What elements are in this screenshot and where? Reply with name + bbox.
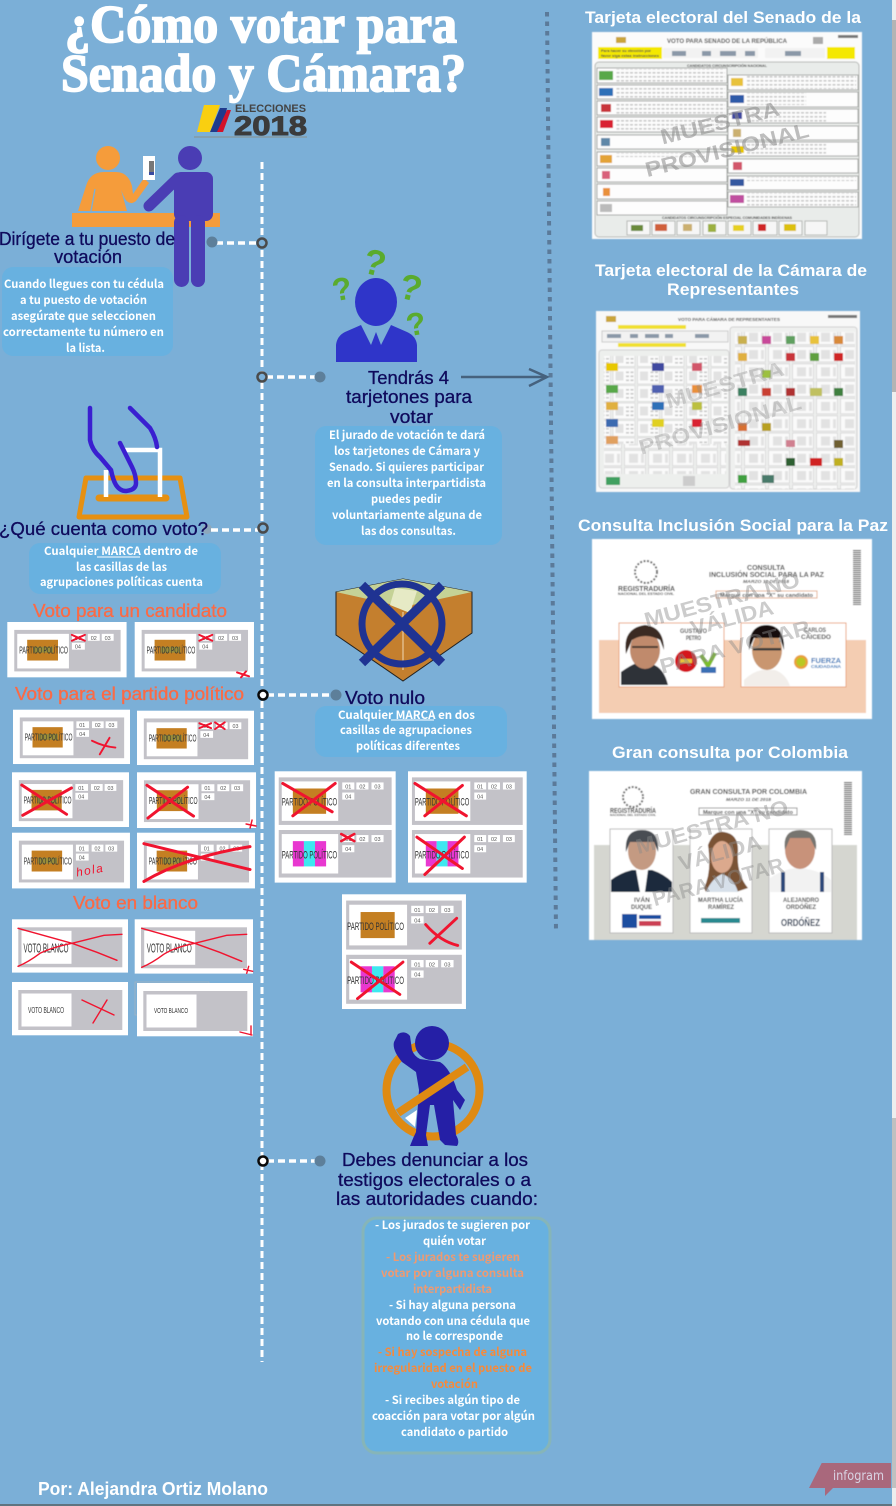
heading: Tendrás 4 tarjetones: tarjetones para xyxy=(346,387,473,407)
ballot image: inclusión social: CARLOS xyxy=(804,627,827,634)
arrow: to ballots xyxy=(461,369,547,386)
ballot: partido 4: 04 xyxy=(204,795,210,801)
icon: person with question marks: ? xyxy=(329,270,355,308)
ballot: partido 3: 04 xyxy=(78,795,84,801)
logo: elecciones 2018 xyxy=(194,103,307,141)
ballot image: inclusión social: VÁLIDA xyxy=(688,596,776,641)
ballot: candidato 2 xyxy=(135,622,254,677)
connector: step 4 xyxy=(258,690,342,700)
title: Senado y Cámara? xyxy=(61,45,466,103)
infogram tag: infogram xyxy=(833,1469,884,1484)
panel: cuatro tarjetones: puedes pedir xyxy=(371,491,443,507)
ballot: nulo B: PARTIDO POLÍTICO xyxy=(415,796,469,809)
ballot: nulo C: PARTIDO POLÍTICO xyxy=(347,920,404,933)
panel: denuncias: - Los jurados te sugieren por xyxy=(375,1217,531,1233)
icon: crossed ballot box xyxy=(336,579,472,681)
ballot image: inclusión social: CAICEDO xyxy=(801,634,831,641)
ballot: nulo C: 02 xyxy=(429,908,435,914)
panel: denuncias: irregularidad en el puesto de xyxy=(374,1360,532,1376)
ballot: partido 6: 02 xyxy=(220,847,226,853)
panel: denuncias: - Si recibes algún tipo de xyxy=(385,1392,520,1408)
panel: cuatro tarjetones: las dos consultas. xyxy=(361,523,456,539)
ballot: nulo A xyxy=(275,771,396,883)
heading: cámara xyxy=(595,261,867,299)
ballot image: inclusión social: GUSTAVO xyxy=(680,628,707,635)
ballot: candidato 2: 01 xyxy=(202,636,208,642)
ballot: partido 1 xyxy=(13,710,130,764)
ballot image: gran consulta: GRAN CONSULTA POR COLOMBIA xyxy=(690,789,807,796)
panel: cualquier marca: agrupaciones políticas cuenta xyxy=(40,574,203,590)
ballot: nulo A: 04 xyxy=(345,795,351,801)
ballot: partido 2: 02 xyxy=(219,724,225,730)
heading: debes denunciar: Debes denunciar a los xyxy=(342,1150,528,1170)
ballot image: inclusión social: REGISTRADURÍA xyxy=(618,584,676,593)
ballot image: senado xyxy=(592,32,862,239)
ballot: partido 6: 03 xyxy=(233,847,239,853)
ballot: partido 6: PARTIDO POLÍTICO xyxy=(149,854,197,868)
ballot image: inclusión social: CONSULTA xyxy=(747,563,786,572)
panel: denuncias: votar por alguna consulta xyxy=(381,1265,524,1281)
icon: person with question marks: ? xyxy=(395,265,427,310)
heading: senado: Tarjeta electoral del Senado de la xyxy=(585,8,862,27)
ballot: blanco 4 xyxy=(135,982,253,1036)
icon: person with question marks: ? xyxy=(403,305,429,343)
ballot: nulo A: 03 xyxy=(374,784,381,791)
heading: Tendrás 4 tarjetones: Tendrás 4 xyxy=(368,368,449,388)
heading: inclusión social: Consulta Inclusión Social para la Paz xyxy=(578,516,888,535)
ballot: partido 3: PARTIDO POLÍTICO xyxy=(24,794,71,807)
heading: qué cuenta como voto: ¿Qué cuenta como voto? xyxy=(0,519,208,539)
ballot image: gran consulta: DUQUE xyxy=(631,905,652,911)
ballot: nulo C: 02 xyxy=(429,962,435,968)
icon: person with question marks xyxy=(329,240,429,362)
ballot: blanco 1: VOTO BLANCO xyxy=(24,940,68,955)
icon: no-coercion sign xyxy=(386,1026,480,1146)
ballot: partido 3: 01 xyxy=(78,786,84,792)
ballot: partido 1: 04 xyxy=(79,732,85,738)
ballot image: senado: PROVISIONAL xyxy=(643,119,812,182)
panel: denuncias: votando con una cédula que xyxy=(376,1313,530,1329)
panel: denuncias: interpartidista xyxy=(413,1281,492,1297)
ballot: partido 5: 04 xyxy=(79,856,85,862)
author credit: Por: Alejandra Ortiz Molano xyxy=(38,1479,268,1499)
panel: nulo: políticas diferentes xyxy=(356,738,460,754)
ballot: partido 1: 03 xyxy=(108,723,114,729)
ballot: partido 2: 01 xyxy=(203,724,209,730)
ballot: candidato 1: PARTIDO POLÍTICO xyxy=(19,644,68,657)
heading: Tendrás 4 tarjetones xyxy=(346,368,473,427)
ballot: blanco 3: VOTO BLANCO xyxy=(28,1006,64,1015)
panel: cuatro tarjetones: los tarjetones de Cámara y xyxy=(334,443,480,459)
infogram tag xyxy=(809,1463,891,1496)
ballot: candidato 2: 03 xyxy=(232,636,238,642)
heading: debes denunciar: las autoridades cuando: xyxy=(336,1189,538,1209)
ballot: nulo A: 02 xyxy=(359,837,365,843)
ballot: partido 4: 03 xyxy=(234,786,240,792)
panel: nulo xyxy=(315,706,507,757)
panel: denuncias: candidato o partido xyxy=(401,1424,508,1440)
ballot: nulo B: 03 xyxy=(506,837,512,843)
ballot: candidato 2: PARTIDO POLÍTICO xyxy=(147,644,195,657)
ballot: candidato 1: 01 xyxy=(75,636,81,642)
ballot: nulo A: 01 xyxy=(345,837,351,843)
ballot image: inclusión social: MUESTRA NO xyxy=(642,569,802,632)
heading: Dirígete: votación xyxy=(54,247,122,267)
heading: cámara: Tarjeta electoral de la Cámara de xyxy=(595,261,867,280)
ballot: blanco 2 xyxy=(135,919,253,974)
ballot image: senado: Para hacer su elección por xyxy=(601,48,651,53)
ballot: nulo B: 01 xyxy=(477,837,483,843)
ballot image: senado: MUESTRA xyxy=(658,98,782,149)
ballot: nulo B: PARTIDO POLÍTICO xyxy=(415,848,469,861)
panel: al llegar: a tu puesto de votación xyxy=(20,292,147,308)
panel: al llegar: Cuando llegues con tu cédula xyxy=(4,276,164,292)
ballot: nulo B: 04 xyxy=(477,847,483,853)
ballot: partido 5: hola xyxy=(75,861,105,879)
ballot: nulo C: PARTIDO POLÍTICO xyxy=(347,974,404,987)
ballot: partido 3: 03 xyxy=(107,786,113,792)
ballot: partido 2: 03 xyxy=(232,724,238,730)
panel: denuncias xyxy=(363,1217,550,1453)
ballot: nulo B: 02 xyxy=(491,837,497,843)
logo: elecciones 2018: 2018 xyxy=(234,111,307,141)
icon: voter at the polling table xyxy=(72,146,220,287)
ballot: nulo B: 04 xyxy=(477,795,483,801)
ballot: nulo A: 03 xyxy=(374,837,381,843)
ballot: partido 1: PARTIDO POLÍTICO xyxy=(25,731,73,744)
heading: Dirígete xyxy=(0,229,175,267)
ballot image: gran consulta: PARA VOTAR xyxy=(650,854,786,911)
connector: step 2 xyxy=(258,372,326,382)
ballot: partido 5 xyxy=(12,833,130,888)
ballot: partido 4 xyxy=(137,772,256,828)
panel: denuncias: quién votar xyxy=(423,1233,487,1249)
heading: voto para un candidato: Voto para un candidato xyxy=(33,601,227,621)
heading: voto nulo: Voto nulo xyxy=(345,688,425,708)
ballot: partido 3: 02 xyxy=(94,786,100,792)
ballot image: inclusión social: MARZO 11 DE 2018 xyxy=(743,579,790,584)
panel: denuncias: - Si hay sospecha de alguna xyxy=(378,1344,527,1360)
ballot: nulo B: 02 xyxy=(491,784,497,791)
heading: voto para el partido: Voto para el partido político xyxy=(15,684,244,704)
ballot: candidato 2: 02 xyxy=(218,636,224,642)
ballot: nulo B: 03 xyxy=(506,784,512,791)
panel: nulo: Cualquier MARCA en dos xyxy=(338,707,475,723)
panel: cuatro tarjetones: Senado. Si quieres participar xyxy=(329,459,485,475)
ballot image: inclusión social: FUERZA xyxy=(811,656,842,665)
ballot image: gran consulta: NACIONAL DEL ESTADO CIVIL xyxy=(610,813,656,817)
ballot: partido 1: 01 xyxy=(79,723,85,729)
connector: step 1 xyxy=(206,236,266,248)
ballot image: inclusión social xyxy=(592,539,872,719)
ballot: candidato 2: 04 xyxy=(202,645,208,651)
ballot: partido 6: 01 xyxy=(204,847,210,853)
ballot: partido 5: 03 xyxy=(108,847,114,853)
ballot image: gran consulta: ORDÓÑEZ xyxy=(781,916,820,929)
ballot: candidato 1: 03 xyxy=(105,636,111,642)
panel: cuatro tarjetones: voluntariamente alguna de xyxy=(332,507,482,523)
ballot image: gran consulta: ORDÓÑEZ xyxy=(786,903,816,911)
ballot: nulo C: 04 xyxy=(414,973,421,979)
panel: cualquier marca: las casillas de las xyxy=(76,559,167,575)
heading: Dirígete: Dirígete a tu puesto de xyxy=(0,229,175,249)
ballot: nulo A: 02 xyxy=(359,784,365,791)
ballot: blanco 3 xyxy=(12,982,128,1035)
ballot: blanco 4: VOTO BLANCO xyxy=(154,1006,188,1015)
ballot: nulo C: 04 xyxy=(414,918,421,924)
panel: al llegar xyxy=(2,267,173,356)
panel: cualquier marca xyxy=(29,543,221,594)
ballot: partido 2: 04 xyxy=(203,733,209,739)
title xyxy=(61,0,466,103)
ballot: partido 4: PARTIDO POLÍTICO xyxy=(149,794,198,807)
ballot image: inclusión social: PARA VOTAR xyxy=(657,616,813,679)
ballot: partido 6: 04 xyxy=(204,856,210,862)
ballot image: gran consulta: VÁLIDA xyxy=(676,831,764,876)
ballot: partido 4: 02 xyxy=(220,786,226,792)
ballot: nulo A: PARTIDO POLÍTICO xyxy=(282,848,337,861)
icon: person with question marks: ? xyxy=(359,240,391,285)
ballot image: cámara: MUESTRA xyxy=(663,358,787,413)
panel: denuncias: votación xyxy=(431,1376,478,1392)
ballot image: gran consulta: MARZO 11 DE 2018 xyxy=(726,797,772,802)
panel: al llegar: correctamente tu número en xyxy=(3,324,164,340)
ballot image: gran consulta: ALEJANDRO xyxy=(783,898,819,904)
panel: cuatro tarjetones: en la consulta interpartidista xyxy=(327,475,486,491)
ballot: candidato 1 xyxy=(7,622,127,677)
ballot: partido 5: 02 xyxy=(95,847,101,853)
ballot image: inclusión social: CIUDADANA xyxy=(811,664,842,669)
panel: denuncias: no le corresponde xyxy=(406,1328,503,1344)
ballot image: gran consulta: REGISTRADURÍA xyxy=(610,806,656,815)
ballot: nulo A: PARTIDO POLÍTICO xyxy=(282,796,337,809)
panel: al llegar: la lista. xyxy=(66,340,105,356)
ballot: partido 4: 01 xyxy=(204,786,210,792)
ballot: nulo A: 01 xyxy=(345,784,351,791)
panel: cualquier marca: Cualquier MARCA dentro de xyxy=(44,543,198,559)
ballot image: gran consulta: Marque con una "X" su candidato xyxy=(703,810,794,816)
ballot: partido 5: PARTIDO POLÍTICO xyxy=(24,854,72,868)
ballot: nulo B: 01 xyxy=(477,784,483,791)
connector: step 3 xyxy=(202,524,268,534)
ballot image: cámara: VOTO PARA CÁMARA DE REPRESENTANTES xyxy=(678,316,780,322)
ballot image: gran consulta: RAMÍREZ xyxy=(708,903,734,911)
ballot: partido 6 xyxy=(137,833,255,888)
ballot: nulo C xyxy=(342,894,466,1009)
panel: cuatro tarjetones: El jurado de votación te dará xyxy=(329,427,485,443)
timeline: vertical dashed line xyxy=(260,162,264,1362)
heading: cámara: Representantes xyxy=(667,280,799,299)
heading: debes denunciar: testigos electorales o a xyxy=(338,1170,532,1190)
ballot: nulo C: 01 xyxy=(414,962,421,968)
ballot: blanco 1 xyxy=(12,919,128,973)
ballot image: cámara xyxy=(596,311,860,492)
ballot: partido 2: PARTIDO POLÍTICO xyxy=(149,732,197,745)
ballot image: senado: CANDIDATOS CIRCUNSCRIPCIÓN NACIONAL xyxy=(687,63,768,68)
ballot image: gran consulta: IVÁN xyxy=(634,897,650,904)
panel: denuncias: - Si hay alguna persona xyxy=(389,1297,516,1313)
ballot: candidato 1: 04 xyxy=(75,645,81,651)
divider: right dotted line xyxy=(547,12,556,932)
ballot: nulo C: 03 xyxy=(444,908,451,914)
panel: denuncias: coacción para votar por algún xyxy=(372,1408,535,1424)
panel: denuncias: - Los jurados te sugieren xyxy=(386,1249,520,1265)
ballot: nulo C: 01 xyxy=(414,908,421,914)
ballot: nulo C: 03 xyxy=(444,962,451,968)
ballot image: gran consulta xyxy=(589,771,862,940)
ballot image: senado: CANDIDATOS CIRCUNSCRIPCIÓN ESPECIAL COMUNIDADES INDÍGENAS xyxy=(662,215,793,220)
ballot: partido 1: 02 xyxy=(95,723,101,729)
ballot: nulo A: 04 xyxy=(345,847,351,853)
heading: gran consulta: Gran consulta por Colombia xyxy=(612,743,849,762)
ballot: blanco 2: VOTO BLANCO xyxy=(147,940,192,955)
ballot image: gran consulta: MUESTRA NO xyxy=(633,796,791,859)
heading: Tendrás 4 tarjetones: votar xyxy=(390,407,433,427)
icon: hand depositing ballot xyxy=(79,408,187,517)
logo: elecciones 2018: ELECCIONES xyxy=(235,103,306,115)
panel: al llegar: asegúrate que seleccionen xyxy=(11,308,156,324)
heading: voto en blanco: Voto en blanco xyxy=(73,893,198,913)
ballot: partido 2 xyxy=(137,711,254,765)
ballot: partido 5: 01 xyxy=(79,847,85,853)
heading: debes denunciar xyxy=(336,1150,538,1209)
ballot image: cámara: PROVISIONAL xyxy=(636,391,804,460)
panel: nulo: casillas de agrupaciones xyxy=(340,722,472,738)
ballot image: inclusión social: NACIONAL DEL ESTADO CIVIL xyxy=(618,592,674,596)
ballot image: senado: favor siga estas instrucciones xyxy=(601,53,660,58)
panel: cuatro tarjetones xyxy=(315,426,502,545)
ballot image: inclusión social: INCLUSIÓN SOCIAL PARA LA PAZ xyxy=(709,570,825,579)
ballot: candidato 1: 02 xyxy=(91,636,97,642)
connector: step 5 xyxy=(258,1156,326,1166)
ballot image: inclusión social: Marque con una "X" su candidato xyxy=(720,593,814,599)
ballot: partido 3 xyxy=(12,772,129,827)
ballot image: inclusión social: PETRO xyxy=(686,635,701,642)
ballot image: senado: VOTO PARA SENADO DE LA REPÚBLICA xyxy=(667,38,788,45)
ballot: nulo B xyxy=(408,771,527,883)
ballot image: gran consulta: MARTHA LUCÍA xyxy=(698,896,744,904)
